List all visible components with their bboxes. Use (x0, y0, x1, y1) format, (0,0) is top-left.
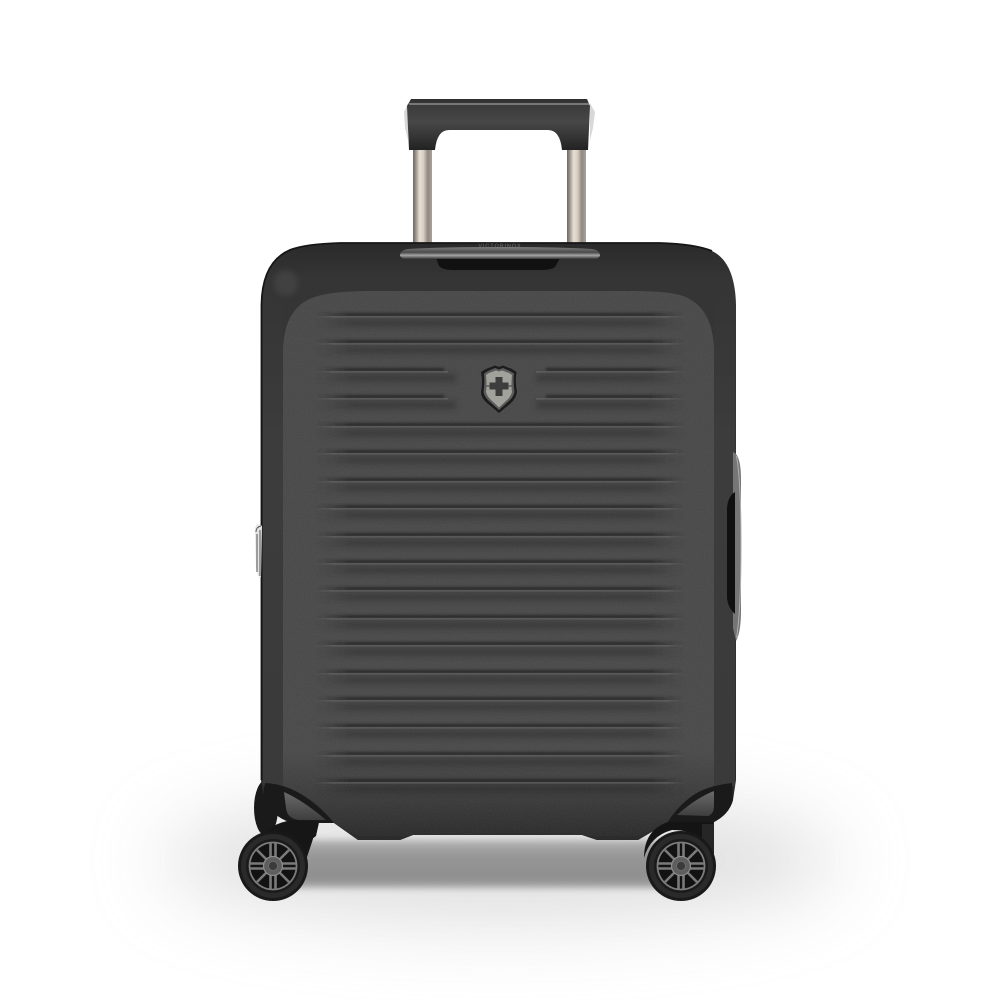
handle side highlights (404, 103, 595, 140)
right wheel assembly (644, 822, 716, 901)
horizontal ribs (314, 313, 686, 793)
left wheel assembly (238, 820, 318, 901)
left wheel (238, 831, 308, 901)
handle trim (400, 247, 600, 259)
corner highlight (274, 270, 298, 296)
recess (436, 258, 560, 270)
emblem: shield with cross (481, 366, 517, 413)
floor shadow (160, 798, 840, 922)
right corner housing (667, 783, 733, 823)
shell grain (283, 291, 714, 836)
shell edge (262, 243, 712, 780)
rear wheels (254, 780, 320, 842)
handle grip (407, 99, 590, 150)
left corner housing (263, 783, 334, 823)
right side band (714, 290, 735, 786)
emblem cross (490, 377, 508, 396)
left side band (263, 290, 283, 786)
left fork (262, 820, 318, 860)
handle tube: right (567, 148, 586, 244)
telescopic handle (404, 99, 595, 244)
suitcase shell (261, 243, 736, 840)
brand emboss: VICTORINOX (478, 244, 522, 250)
left side zip puller (255, 524, 262, 577)
front panel (283, 291, 714, 840)
outer shell (261, 243, 736, 840)
right wheel (646, 831, 716, 901)
right side handle (727, 452, 741, 641)
handle tube: left (413, 148, 432, 244)
grip highlight (409, 103, 589, 105)
top carry handle (400, 244, 600, 270)
right fork (644, 822, 714, 860)
